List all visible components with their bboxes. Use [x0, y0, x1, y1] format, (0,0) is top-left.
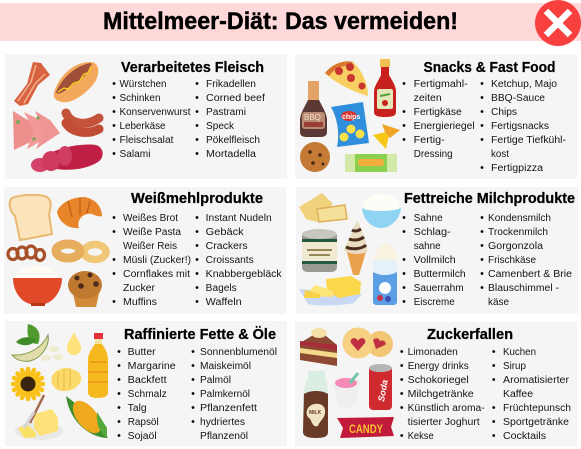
- icon: butter dish: [299, 276, 362, 305]
- list: column 1: Weißes Brot: [123, 213, 178, 224]
- icon: chips bag: chips: [342, 114, 360, 121]
- icon: oil bottle: [88, 333, 108, 398]
- panel: Snacks & Fast Food: [295, 54, 577, 179]
- list: column 1: Fleischsalat: [120, 135, 174, 146]
- icon: chips bag: [331, 102, 369, 147]
- heading: Raffinierte Fette & Öle: [124, 326, 276, 343]
- icon: rice bowl: [13, 266, 62, 306]
- list: column 1: Butter: [128, 347, 156, 358]
- list: column 1: Limonaden: [408, 347, 458, 358]
- list: column 2: Gorgonzola: [488, 241, 543, 252]
- list: column 1: Müsli (Zucker!): [123, 255, 191, 266]
- list: column 1: [403, 79, 475, 160]
- heading: Fettreiche Milchprodukte: [404, 191, 575, 207]
- list: column 2: Instant Nudeln: [206, 213, 272, 224]
- list: column 2: Chips: [491, 107, 517, 118]
- list: column 1: Sahne: [414, 213, 443, 224]
- panel: Fettreiche Milchprodukte: [296, 187, 578, 314]
- list: column 1: Zucker: [123, 283, 156, 294]
- list: column 2: Palmöl: [200, 375, 231, 386]
- list: column 1: Schmalz: [128, 389, 167, 400]
- panel: Weißmehlprodukte: [4, 187, 286, 314]
- list: column 2: Sirup: [503, 361, 526, 372]
- list: column 2: [196, 213, 283, 308]
- panel: Raffinierte Fette & Öle: [5, 321, 287, 446]
- list: column 2: Fertigpizza: [491, 163, 543, 174]
- list: column 2: Gebäck: [206, 227, 245, 238]
- icon: jam cookies: [342, 328, 393, 358]
- icon: red cross: [535, 0, 581, 46]
- list: column 1: Sojaöl: [128, 431, 157, 442]
- icon: butter curl: [51, 368, 81, 391]
- list: column 2: Pflanzenöl: [200, 431, 248, 442]
- icon: soda can: [369, 364, 392, 410]
- list: column 1: Schinken: [120, 93, 160, 104]
- icon: bread slice: [10, 195, 52, 240]
- icon: sunflower: [13, 369, 43, 399]
- icon: muffin: [68, 271, 102, 307]
- icon: corn: [66, 396, 108, 438]
- list: column 1: Salami: [120, 149, 150, 160]
- list: column 2: Waffeln: [206, 297, 242, 308]
- list: column 2: käse: [488, 297, 509, 308]
- icon: nachos: [373, 124, 400, 149]
- list: column 2: [196, 79, 265, 160]
- list: column 1: sahne: [414, 241, 441, 252]
- list: column 2: Sportgetränke: [503, 417, 569, 428]
- icon: candy wrapper: [337, 417, 394, 438]
- list: column 1: Backfett: [128, 375, 167, 386]
- list: column 2: Kondensmilch: [488, 213, 551, 224]
- list: column 2: Fertige Tiefkühl-: [491, 135, 566, 146]
- icon: pizza: [325, 61, 368, 96]
- list: column 1: Energieriegel: [414, 121, 475, 132]
- list: column 1: [113, 79, 191, 160]
- list: column 1: Cornflakes mit: [123, 269, 190, 280]
- icon: soda can: Soda: [376, 379, 390, 402]
- list: column 1: Fertig-: [414, 135, 445, 146]
- icon: soft ice cream: [344, 221, 367, 275]
- list: column 1: Künstlich aroma-: [408, 403, 485, 414]
- list: column 2: [492, 347, 571, 442]
- icon: soybeans: [12, 324, 63, 361]
- list: column 1: Kekse: [408, 431, 434, 442]
- icon: yogurt cup: [333, 373, 360, 408]
- icon: hot dog: [54, 62, 98, 102]
- icon: pretzel: [8, 246, 44, 260]
- list: column 2: hydriertes: [200, 417, 245, 428]
- list: column 1: Talg: [128, 403, 147, 414]
- list: column 1: Margarine: [128, 361, 176, 372]
- list: column 2: Bagels: [206, 283, 237, 294]
- list: column 2: Maiskeimöl: [200, 361, 251, 372]
- icon: oil drop: [67, 332, 81, 355]
- list: column 2: [481, 213, 572, 308]
- list: column 2: Pastrami: [206, 107, 246, 118]
- icon: condensed milk can: [302, 229, 337, 272]
- icon: candy wrapper: CANDY: [349, 422, 383, 436]
- list: column 2: Pflanzenfett: [200, 403, 257, 414]
- list: column 2: Blauschimmel -: [488, 283, 559, 294]
- list: column 1: Vollmilch: [414, 255, 456, 266]
- list: column 2: Frischkäse: [488, 255, 536, 266]
- header banner: [0, 0, 581, 46]
- list: column 2: Camenbert & Brie: [488, 269, 572, 280]
- icon: croissant: [57, 197, 102, 228]
- list: column 1: Milchgetränke: [408, 389, 474, 400]
- icon: cookie: [300, 142, 330, 172]
- list: column 2: Corned beef: [206, 93, 265, 104]
- icon: bacon: [14, 62, 50, 106]
- icon: sausages: [66, 113, 99, 132]
- icon: snack bar: [345, 154, 397, 172]
- list: column 1: [400, 347, 485, 442]
- list: column 2: Kaffee: [503, 389, 533, 400]
- icon: salami: [31, 144, 103, 172]
- list: column 2: Frikadellen: [206, 79, 256, 90]
- heading: Zuckerfallen: [427, 327, 513, 343]
- icon: BBQ sauce bottle: BBQ: [304, 113, 321, 122]
- icon: ham slices: [13, 111, 60, 150]
- list: column 1: Eiscreme: [414, 297, 455, 308]
- list: column 1: Würstchen: [120, 79, 166, 90]
- list: column 1: [113, 213, 191, 308]
- list: column 2: Sonnenblumenöl: [200, 347, 277, 358]
- icon: chocolate milk bottle: [303, 371, 328, 438]
- icon: ketchup bottle: [374, 59, 396, 117]
- list: column 1: Konservenwurst: [120, 107, 191, 118]
- list: column 1: Fertigmahl-: [414, 79, 468, 90]
- list: column 1: zeiten: [414, 93, 442, 104]
- list: column 1: Energy drinks: [408, 361, 469, 372]
- list: column 1: Dressing: [414, 149, 453, 160]
- list: column 2: Aromatisierter: [503, 375, 570, 386]
- icon: whipped cream can: [373, 243, 397, 305]
- list: column 2: Croissants: [206, 255, 254, 266]
- list: column 2: Palmkernöl: [200, 389, 250, 400]
- list: column 2: Ketchup, Majo: [491, 79, 557, 90]
- list: column 1: [118, 347, 176, 442]
- list: column 2: Mortadella: [206, 149, 256, 160]
- list: column 1: Schokoriegel: [408, 375, 469, 386]
- list: column 2: [481, 79, 566, 174]
- list: column 2: Crackers: [206, 241, 248, 252]
- list: column 2: kost: [491, 149, 509, 160]
- list: column 2: Cocktails: [503, 431, 546, 442]
- heading: Weißmehlprodukte: [131, 191, 263, 207]
- list: column 1: Muffins: [123, 297, 157, 308]
- list: column 1: Fertigkäse: [414, 107, 462, 118]
- icon: cheese: [299, 193, 347, 222]
- icon: cake slice: [300, 328, 337, 366]
- list: column 2: Früchtepunsch: [503, 403, 571, 414]
- icon: bagels: [56, 244, 106, 260]
- icon: cream bowl: [362, 194, 401, 228]
- list: column 1: Weiße Pasta: [123, 227, 181, 238]
- list: column 2: [192, 347, 277, 442]
- list: column 2: BBQ-Sauce: [491, 93, 545, 104]
- list: column 1: Schlag-: [414, 227, 451, 238]
- list: column 1: Buttermilch: [414, 269, 466, 280]
- list: column 1: Weißer Reis: [123, 241, 177, 252]
- icon: BBQ sauce bottle: [300, 81, 327, 137]
- list: column 2: Fertigsnacks: [491, 121, 549, 132]
- panel: Verarbeitetes Fleisch: [5, 54, 287, 179]
- list: column 2: Speck: [206, 121, 235, 132]
- icon: chocolate milk bottle: MILK: [309, 410, 322, 416]
- list: column 1: [403, 213, 466, 308]
- list: column 2: Pökelfleisch: [206, 135, 260, 146]
- list: column 1: tisierter Joghurt: [408, 417, 480, 428]
- heading: Verarbeitetes Fleisch: [121, 60, 264, 76]
- list: column 2: Trockenmilch: [488, 227, 548, 238]
- title: Mittelmeer-Diät: Das vermeiden!: [103, 8, 458, 35]
- list: column 1: Leberkäse: [120, 121, 166, 132]
- panel: Zuckerfallen: [295, 322, 577, 446]
- list: column 2: Knabbergebläck: [206, 269, 283, 280]
- list: column 1: Rapsöl: [128, 417, 159, 428]
- list: column 2: Kuchen: [503, 347, 536, 358]
- icon: butter on plate: [15, 395, 63, 440]
- heading: Snacks & Fast Food: [424, 60, 556, 76]
- list: column 1: Sauerrahm: [414, 283, 464, 294]
